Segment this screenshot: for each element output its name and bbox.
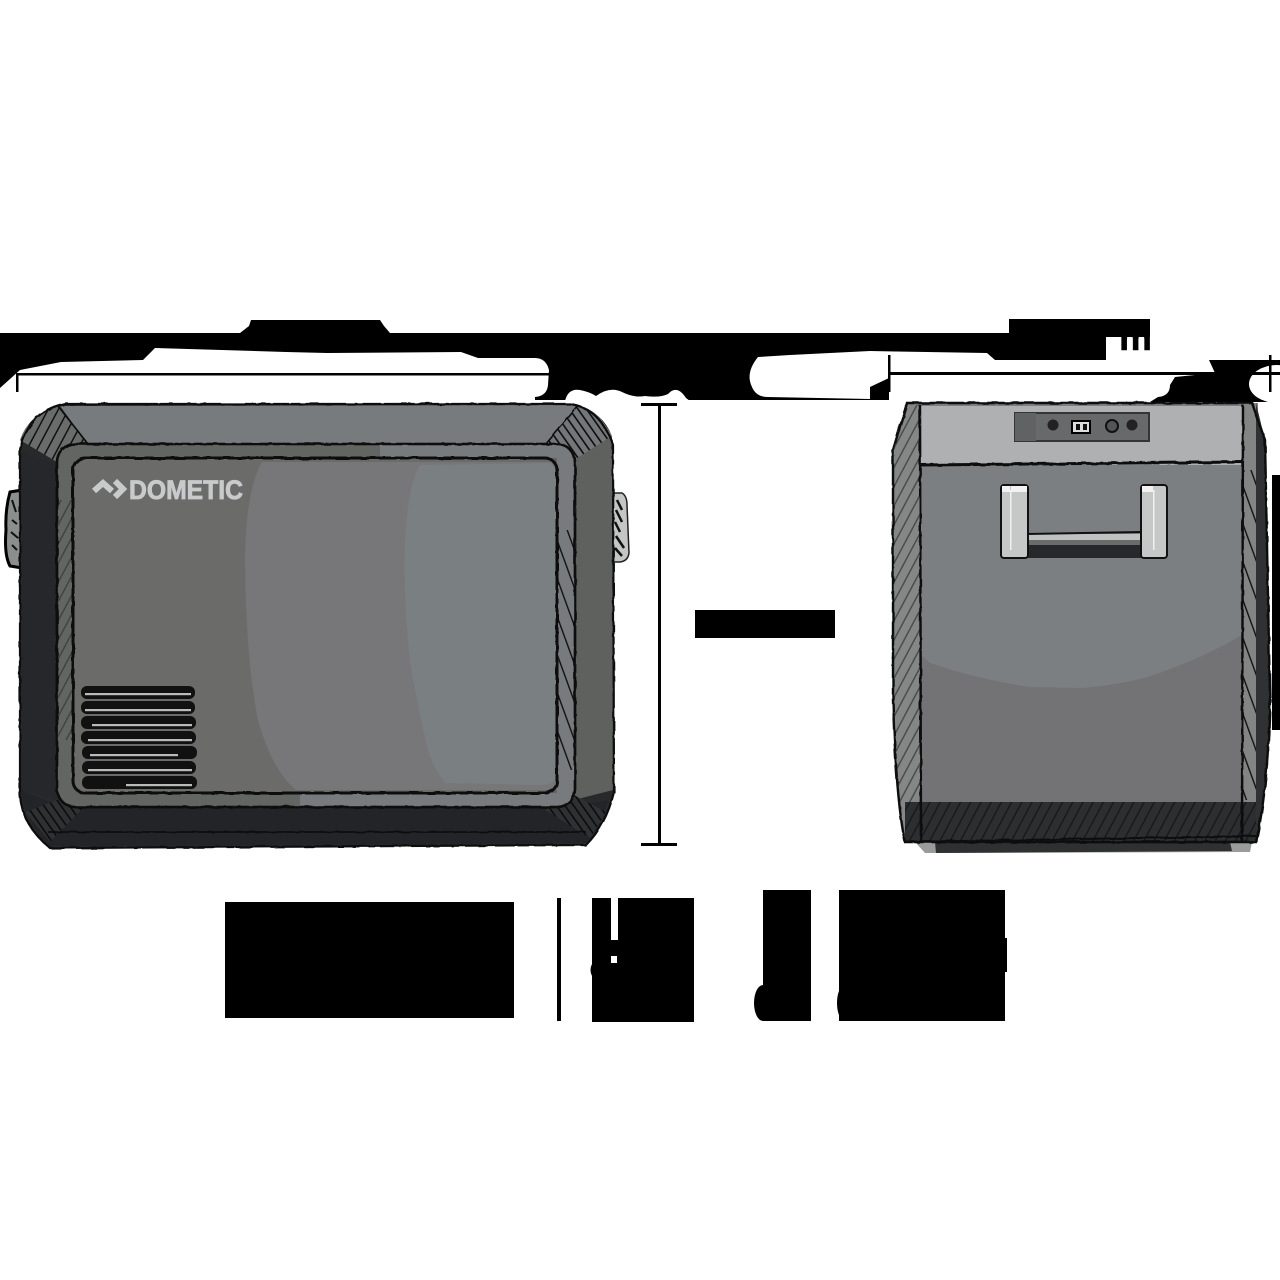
top left corner facet	[20, 406, 88, 462]
panel display	[1072, 421, 1090, 433]
bevel ring light right portion	[300, 444, 575, 807]
bottom wall	[21, 790, 608, 846]
logo chevrons	[94, 481, 123, 497]
lid top band	[920, 406, 1243, 465]
front face lower tone	[921, 635, 1242, 802]
panel screw right	[1126, 420, 1138, 430]
bottom divider line	[557, 898, 561, 1021]
front panel middle tone	[245, 462, 557, 790]
cooler front view	[6, 404, 629, 848]
side width label unit: m	[1119, 317, 1152, 358]
front panel base	[73, 458, 557, 793]
logo	[94, 475, 243, 505]
dimension line: height	[641, 403, 677, 846]
black banner across the top dimensions	[0, 319, 1280, 403]
white notch scallops	[565, 390, 690, 401]
cooler side view	[893, 403, 1270, 853]
panel screw left	[1048, 420, 1058, 430]
right dark edge	[1256, 403, 1270, 842]
height label	[695, 610, 835, 638]
left side wall	[22, 452, 57, 800]
bottom dark band	[905, 802, 1256, 842]
black bar at right edge	[1272, 475, 1280, 730]
carry handle	[1001, 485, 1167, 558]
logo wordmark: DOMETIC	[129, 475, 243, 505]
outer shell	[20, 404, 614, 848]
bottom black block: left	[225, 902, 514, 1018]
handle left arm	[1001, 485, 1028, 558]
bevel hatching right	[558, 530, 574, 770]
side view body	[893, 403, 1270, 842]
raised bevel ring	[57, 444, 575, 807]
dimension line: front width	[16, 373, 549, 392]
bottom corner facets	[545, 795, 606, 838]
bottom black block: narrow	[754, 890, 811, 1021]
top right corner facet	[545, 405, 612, 460]
top bevel	[60, 405, 578, 444]
side view ground shadow	[915, 842, 1252, 853]
handle right arm	[1141, 485, 1167, 558]
right side handle	[610, 493, 629, 562]
right side wall	[574, 436, 613, 800]
handle bar	[1027, 534, 1142, 542]
control panel	[1014, 412, 1150, 442]
bottom black block: middle	[590, 898, 694, 1022]
dimension line: side width	[888, 355, 1280, 392]
sketch outlines	[20, 404, 614, 848]
white cutout right	[1249, 365, 1280, 403]
left side handle	[6, 490, 22, 568]
ventilation grille	[81, 686, 197, 789]
bottom black block: right	[837, 890, 1007, 1021]
left side strip	[893, 403, 921, 842]
side sketch outlines	[893, 403, 1270, 842]
right side strip	[1243, 403, 1258, 842]
bevel hatching left	[58, 500, 73, 740]
front panel light tone	[405, 463, 557, 785]
